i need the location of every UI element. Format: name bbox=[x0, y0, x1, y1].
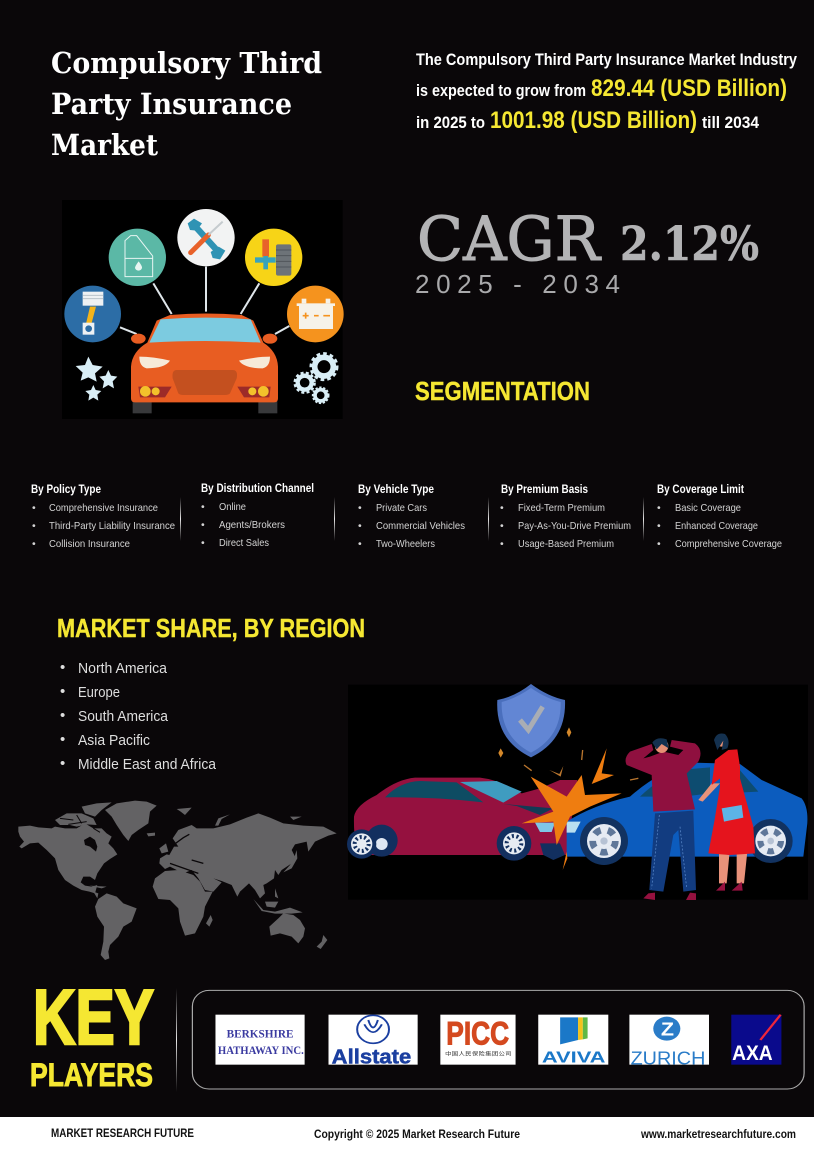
icon: wrench and screwdriver bbox=[177, 209, 235, 266]
logo: Aviva: AVIVA bbox=[542, 1048, 606, 1066]
blue car bbox=[567, 763, 807, 865]
CAGR value: 2.12% bbox=[620, 217, 759, 272]
illustration: car with service icons bbox=[62, 200, 344, 419]
impact burst bbox=[498, 727, 638, 870]
logo: Allstate: Allstate bbox=[332, 1044, 411, 1068]
segment: by coverage limit: • bbox=[657, 538, 661, 550]
title: Compulsory Third bbox=[51, 46, 322, 80]
region list: • bbox=[60, 683, 65, 700]
segment: by policy type: • bbox=[32, 520, 36, 532]
segment: by distribution channel: By Distribution Channel bbox=[201, 483, 314, 495]
segment: by coverage limit: • bbox=[657, 502, 661, 514]
logo: Zurich: ZURICH bbox=[631, 1048, 705, 1069]
CAGR value bbox=[415, 204, 759, 299]
segment: by policy type: • bbox=[32, 502, 36, 514]
footer bar: Copyright © 2025 Market Research Future bbox=[314, 1129, 520, 1141]
segment: by vehicle type: Private Cars bbox=[376, 502, 427, 514]
logo: Allstate bbox=[329, 1015, 418, 1068]
region list: Asia Pacific bbox=[78, 732, 150, 749]
segment: by distribution channel: Agents/Brokers bbox=[219, 519, 285, 531]
segment: by premium basis: Fixed-Term Premium bbox=[518, 502, 605, 514]
title bbox=[51, 46, 322, 162]
logo: Aviva bbox=[538, 1015, 608, 1066]
segment: by premium basis: • bbox=[500, 502, 504, 514]
logo: PICC: 中国人民保险集团公司 bbox=[445, 1050, 512, 1057]
region list bbox=[60, 659, 217, 773]
segment: by policy type bbox=[31, 484, 175, 550]
segment: by coverage limit bbox=[657, 484, 782, 550]
segment: by vehicle type: • bbox=[358, 538, 362, 550]
key players title: KEY bbox=[33, 973, 154, 1061]
logo: Zurich: Z bbox=[661, 1020, 674, 1040]
segmentation columns bbox=[31, 483, 782, 550]
world map bbox=[18, 801, 337, 960]
icon: piston bbox=[64, 286, 121, 342]
CAGR value: CAGR bbox=[417, 204, 602, 275]
segment: by coverage limit: • bbox=[657, 520, 661, 532]
segment: by premium basis bbox=[500, 484, 631, 550]
CAGR value: 2025 - 2034 bbox=[415, 269, 620, 299]
man with hands on head bbox=[626, 738, 701, 900]
region list: Middle East and Africa bbox=[78, 756, 217, 773]
footer bar bbox=[0, 1117, 814, 1150]
key players logos panel bbox=[192, 990, 804, 1089]
segment: by vehicle type: Commercial Vehicles bbox=[376, 520, 465, 532]
segment: by distribution channel: Online bbox=[219, 501, 246, 513]
market growth statement: 1001.98 (USD Billion) bbox=[490, 107, 697, 134]
segment: by premium basis: • bbox=[500, 538, 504, 550]
segment: by premium basis: Pay-As-You-Drive Premium bbox=[518, 520, 631, 532]
segmentation heading: SEGMENTATION bbox=[415, 376, 590, 406]
market growth statement bbox=[416, 50, 797, 134]
segment: by premium basis: By Premium Basis bbox=[501, 484, 588, 496]
segment: by coverage limit: By Coverage Limit bbox=[657, 484, 744, 496]
icon: oil canister bbox=[109, 229, 166, 286]
logo: AXA: AXA bbox=[732, 1041, 773, 1065]
segment: by coverage limit: Comprehensive Coverage bbox=[675, 538, 782, 550]
key players title: PLAYERS bbox=[30, 1057, 153, 1093]
segment: by distribution channel: • bbox=[201, 519, 205, 531]
logo: AXA bbox=[731, 1015, 781, 1065]
segment: by policy type: By Policy Type bbox=[31, 484, 101, 496]
segment: by policy type: Comprehensive Insurance bbox=[49, 502, 158, 514]
Americas and Greenland bbox=[18, 801, 157, 960]
logo: Berkshire Hathaway bbox=[215, 1015, 305, 1065]
segment: by policy type: • bbox=[32, 538, 36, 550]
logo: Berkshire Hathaway: BERKSHIRE bbox=[227, 1026, 294, 1040]
title: Market bbox=[51, 128, 159, 162]
segment: by coverage limit: Enhanced Coverage bbox=[675, 520, 758, 532]
segment: by vehicle type: By Vehicle Type bbox=[358, 484, 434, 496]
region list: North America bbox=[78, 660, 168, 677]
segment: by premium basis: • bbox=[500, 520, 504, 532]
segment: by vehicle type: • bbox=[358, 502, 362, 514]
illustration: car crash with insurance shield bbox=[347, 684, 808, 900]
footer bar: www.marketresearchfuture.com bbox=[640, 1129, 796, 1141]
market growth statement: 829.44 (USD Billion) bbox=[591, 75, 787, 102]
logo: Berkshire Hathaway: HATHAWAY INC. bbox=[218, 1043, 304, 1057]
woman in red dress bbox=[698, 733, 755, 891]
red car bbox=[347, 778, 577, 861]
segment: by vehicle type bbox=[358, 484, 465, 550]
footer bar: MARKET RESEARCH FUTURE bbox=[51, 1128, 194, 1140]
icon: wheel and jack bbox=[245, 229, 302, 286]
segment: by distribution channel: Direct Sales bbox=[219, 537, 269, 549]
logo: PICC: PICC bbox=[446, 1014, 509, 1052]
insurance shield bbox=[497, 684, 565, 757]
segment: by policy type: Third-Party Liability Insurance bbox=[49, 520, 175, 532]
region list: • bbox=[60, 659, 65, 676]
segment: by distribution channel: • bbox=[201, 537, 205, 549]
market share heading: MARKET SHARE, BY REGION bbox=[57, 613, 365, 643]
icon: orange car front bbox=[131, 313, 278, 413]
segment: by coverage limit: Basic Coverage bbox=[675, 502, 741, 514]
logo: PICC bbox=[440, 1014, 516, 1065]
region list: • bbox=[60, 707, 65, 724]
segment: by policy type: Collision Insurance bbox=[49, 538, 130, 550]
region list: South America bbox=[78, 708, 169, 725]
segment: by distribution channel: • bbox=[201, 501, 205, 513]
title: Party Insurance bbox=[51, 87, 292, 121]
market growth statement: in 2025 to bbox=[416, 113, 485, 132]
segment: by vehicle type: • bbox=[358, 520, 362, 532]
logo: Zurich bbox=[629, 1015, 709, 1069]
icon: gears bbox=[295, 354, 337, 403]
icon: battery bbox=[287, 286, 344, 342]
segment: by vehicle type: Two-Wheelers bbox=[376, 538, 435, 550]
market growth statement: is expected to grow from bbox=[416, 81, 586, 100]
region list: Europe bbox=[78, 684, 120, 701]
illustration: man and woman at crash bbox=[626, 733, 755, 900]
icon: stars bbox=[76, 357, 117, 401]
segment: by premium basis: Usage-Based Premium bbox=[518, 538, 614, 550]
Eurasia, Africa and Oceania bbox=[153, 808, 337, 949]
key players title bbox=[30, 973, 154, 1093]
region list: • bbox=[60, 731, 65, 748]
market growth statement: till 2034 bbox=[702, 113, 759, 132]
segment: by distribution channel bbox=[201, 483, 314, 549]
region list: • bbox=[60, 755, 65, 772]
